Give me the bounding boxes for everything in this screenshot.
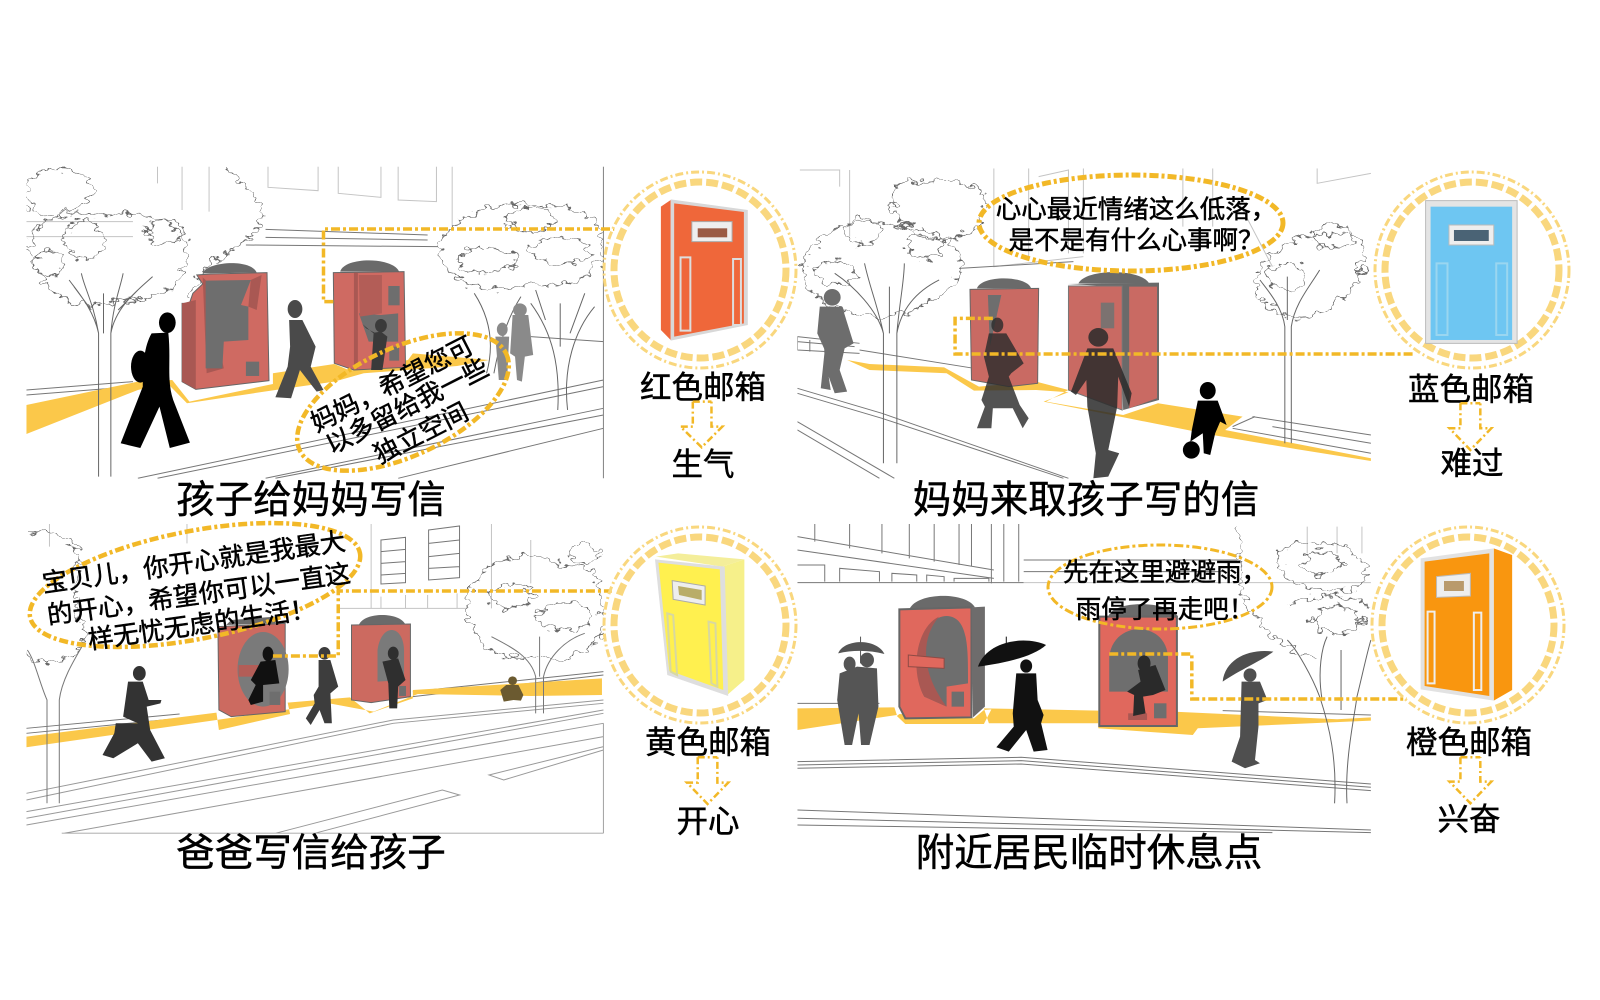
tree	[1238, 527, 1371, 657]
booth A	[218, 617, 289, 717]
speech bubble: 以多留给我一些	[321, 354, 493, 460]
booth B	[333, 260, 406, 370]
street scene: rest stop in the rain	[797, 524, 1371, 833]
couple under umbrella	[837, 637, 884, 745]
arrow	[1449, 403, 1491, 450]
label: excited: 兴奋	[1437, 801, 1501, 837]
child with ball	[1183, 382, 1227, 459]
sidewalk	[797, 707, 1371, 735]
speech bubble: 宝贝儿，你开心就是我最大	[40, 528, 347, 598]
child far	[500, 676, 523, 702]
label: orange mailbox: 橙色邮箱	[1406, 724, 1532, 760]
trees	[803, 180, 1364, 318]
label: red mailbox: 红色邮箱	[640, 369, 766, 405]
woman pedestrian	[275, 300, 323, 398]
panel: child writes to mum	[26, 167, 796, 522]
connector line	[955, 318, 1414, 354]
gray pedestrians	[495, 303, 533, 382]
gray man	[817, 289, 854, 393]
connector line	[323, 229, 614, 302]
child at booth	[362, 319, 387, 370]
label: blue mailbox: 蓝色邮箱	[1408, 371, 1534, 407]
speech bubble	[20, 500, 370, 670]
sidewalk	[26, 678, 602, 747]
street scene: mum collects letter	[797, 168, 1371, 478]
caption: 妈妈来取孩子写的信	[913, 479, 1259, 522]
sidewalk	[26, 353, 489, 434]
booth A	[899, 596, 985, 718]
caption: 孩子给妈妈写信	[176, 479, 446, 522]
mother silhouette	[1071, 328, 1132, 478]
figure in booth B	[382, 647, 406, 708]
arrow	[687, 757, 728, 804]
street scene: child writes letter	[26, 167, 603, 478]
speech bubble	[979, 175, 1283, 271]
mailbox callout: yellow	[604, 527, 796, 723]
connector line	[273, 591, 612, 656]
woman with black umbrella	[978, 637, 1048, 752]
speech bubble: 先在这里避避雨，	[1063, 559, 1267, 587]
speech bubble: 雨停了再走吧！	[1076, 596, 1254, 624]
speech bubble	[1048, 545, 1272, 629]
arrow	[681, 402, 722, 447]
speech bubble: 的开心，希望你可以一直这	[45, 560, 352, 630]
seated father	[248, 647, 279, 705]
street scene: dad writes letter	[26, 524, 603, 833]
label: sad: 难过	[1440, 445, 1504, 481]
label: yellow mailbox: 黄色邮箱	[645, 724, 771, 760]
mailbox callout: orange	[1372, 527, 1564, 723]
seated figure	[1127, 655, 1165, 716]
man with umbrella	[1223, 651, 1273, 768]
panel: dad writes to child	[20, 500, 796, 875]
speech bubble: 妈妈，希望您可	[306, 332, 478, 438]
sidewalk	[847, 360, 1371, 461]
speech bubble: 独立空间	[370, 398, 473, 470]
booth B	[1067, 272, 1159, 410]
booth B	[351, 615, 410, 703]
speech bubble: 心心最近情绪这么低落，	[996, 196, 1276, 224]
caption: 爸爸写信给孩子	[176, 832, 446, 875]
man with backpack	[121, 312, 190, 448]
panel: temporary rest stop	[797, 524, 1564, 875]
woman with bag	[306, 647, 338, 725]
panel: mum collects letter	[797, 168, 1569, 522]
speech bubble	[277, 305, 529, 499]
label: angry: 生气	[671, 446, 735, 482]
trees	[27, 168, 603, 320]
booth B	[1099, 604, 1178, 726]
booth A	[182, 263, 269, 389]
speech bubble: 是不是有什么心事啊？	[1008, 227, 1264, 255]
label: happy: 开心	[676, 803, 740, 839]
booth A	[970, 278, 1039, 387]
speech bubble: 样无忧无虑的生活！	[86, 595, 317, 655]
arrow	[1449, 757, 1491, 803]
caption: 附近居民临时休息点	[916, 832, 1262, 875]
connector line	[1109, 654, 1407, 699]
man in coat with briefcase	[103, 666, 165, 762]
woman with handbag	[977, 318, 1029, 428]
mailbox callout: blue	[1375, 172, 1569, 368]
mailbox callout: red	[604, 172, 796, 368]
trees	[27, 532, 603, 662]
